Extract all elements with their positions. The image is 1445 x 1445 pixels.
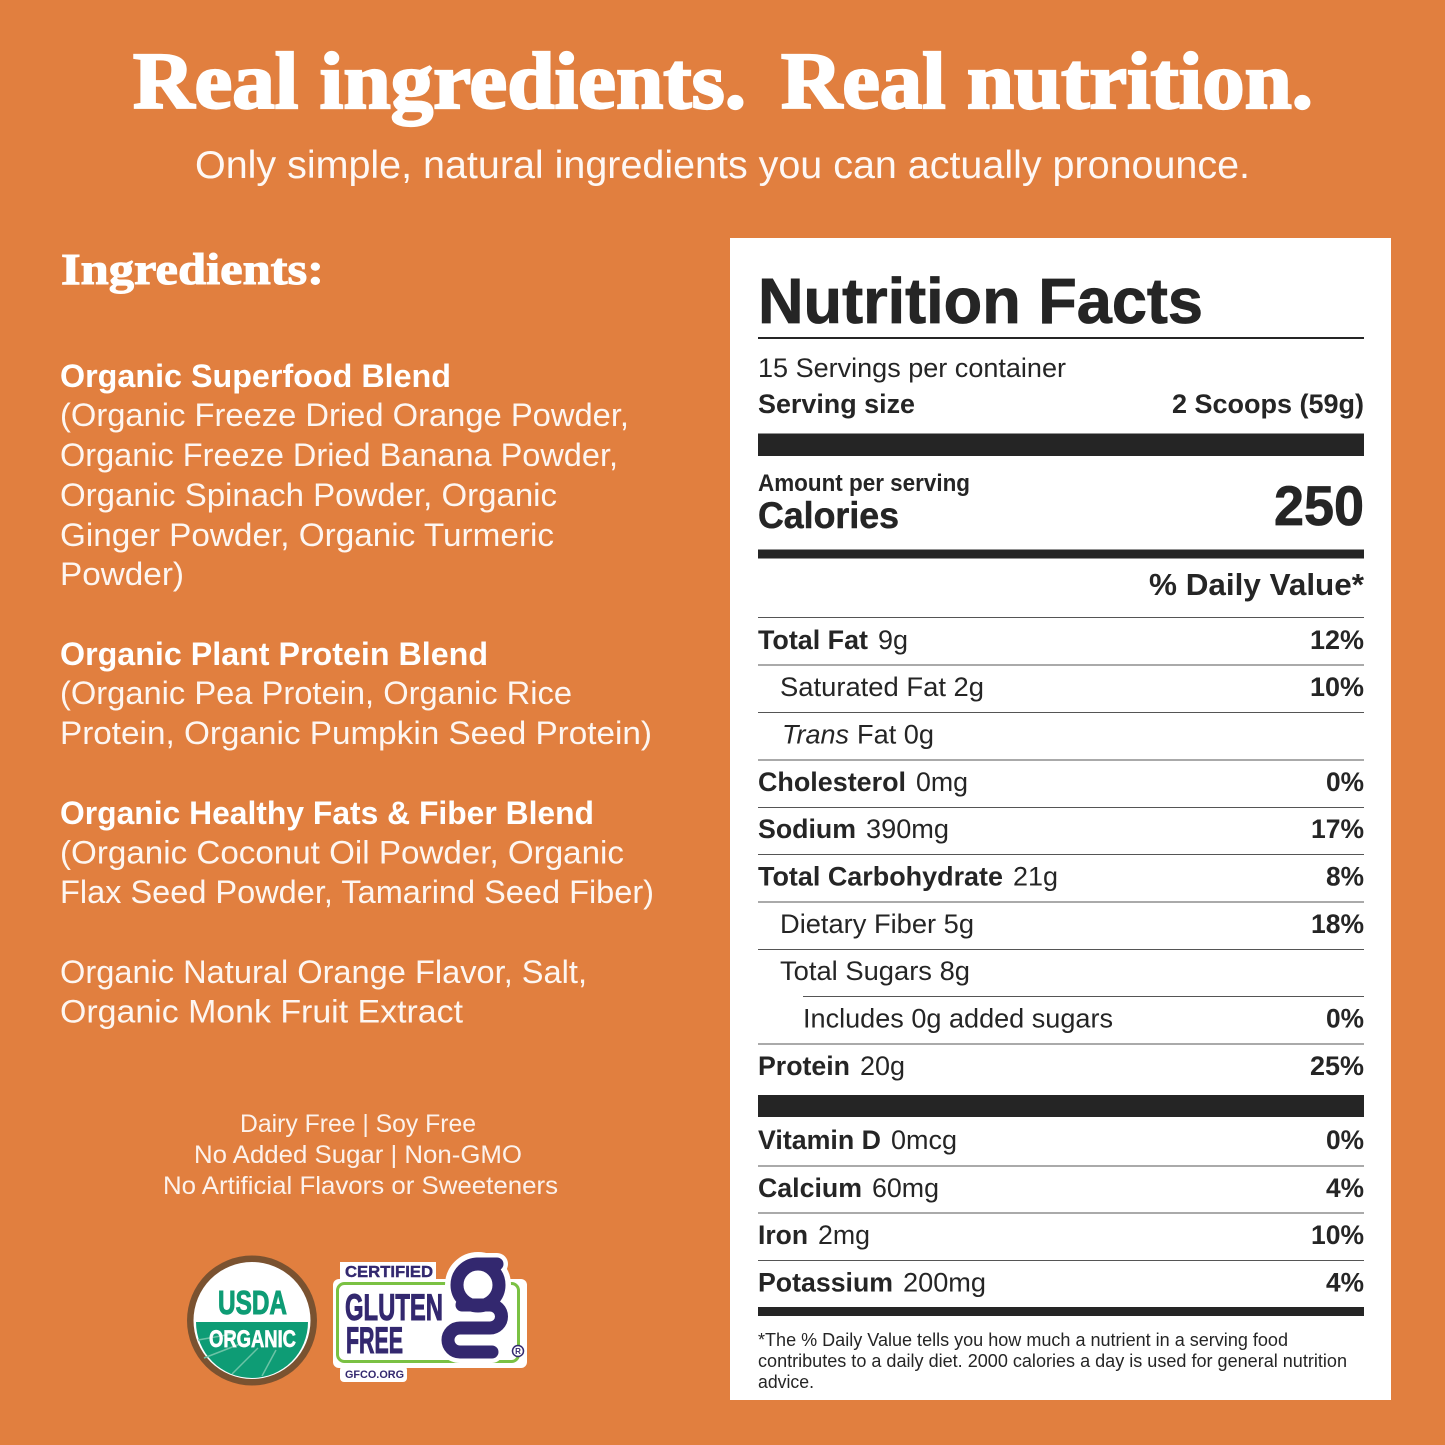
text block: organic superfood blend: Ginger Powder, Organic Turmeric (60, 517, 554, 553)
text block: other ingredients: Organic Monk Fruit Extract (60, 994, 463, 1030)
row: iron: 2mg (818, 1220, 870, 1250)
row: trans fat (782, 720, 934, 750)
row: potassium (758, 1268, 1364, 1298)
icon: certified gluten free badge: CERTIFIED (345, 1264, 433, 1281)
row: potassium: Potassium (758, 1268, 893, 1298)
nutrient rows (758, 625, 1364, 1298)
row: total carbohydrate: Total Carbohydrate (758, 862, 1003, 892)
row: total carbohydrate: 21g (1013, 862, 1058, 892)
row: vitamin d: Vitamin D (758, 1125, 881, 1155)
row: cholesterol: Cholesterol (758, 767, 906, 797)
calories (758, 470, 1364, 537)
text block: organic superfood blend: Organic Spinach Powder, Organic (60, 477, 557, 513)
text block: organic superfood blend: Organic Freeze Dried Banana Powder, (60, 437, 618, 473)
row: saturated fat: Saturated Fat 2g (780, 672, 984, 702)
row: protein: 20g (860, 1051, 905, 1081)
row: calcium: Calcium (758, 1173, 862, 1203)
row: vitamin d (758, 1125, 1364, 1155)
row: vitamin d: 0mcg (891, 1125, 957, 1155)
row: protein (758, 1051, 1364, 1081)
row: iron: Iron (758, 1220, 808, 1250)
title (133, 38, 1313, 126)
row: sodium: 390mg (866, 814, 949, 844)
row: added sugars (803, 1004, 1364, 1034)
row: total fat: 12% (1310, 625, 1364, 655)
row: calcium: 60mg (872, 1173, 939, 1203)
row: trans fat: Trans (782, 720, 849, 750)
panel: nutrition facts (730, 238, 1391, 1400)
title: Real nutrition. (781, 38, 1313, 126)
row: dietary fiber: Dietary Fiber 5g (780, 909, 974, 939)
row: added sugars: Includes 0g added sugars (803, 1004, 1113, 1034)
icon: certified gluten free badge: R (515, 1347, 521, 1356)
row: calcium (758, 1173, 1364, 1203)
text block: organic healthy fats and fiber blend: Flax Seed Powder, Tamarind Seed Fiber) (60, 874, 654, 910)
text block: organic healthy fats and fiber blend: (Organic Coconut Oil Powder, Organic (60, 834, 624, 870)
row: protein: Protein (758, 1051, 850, 1081)
row: saturated fat: 10% (1310, 672, 1364, 702)
icon: certified gluten free badge: GFCO.ORG (345, 1369, 404, 1381)
row: dietary fiber: 18% (1311, 909, 1364, 939)
row: vitamin d: 0% (1326, 1125, 1364, 1155)
icon: certified gluten free badge: GLUTEN (345, 1287, 443, 1328)
icon: certified gluten free badge: FREE (346, 1320, 403, 1361)
ingredients heading: Ingredients: (61, 245, 324, 294)
serving size (758, 389, 1364, 419)
serving size: 2 Scoops (59g) (1172, 389, 1364, 419)
row: total carbohydrate (758, 862, 1364, 892)
row: protein: 25% (1310, 1051, 1364, 1081)
subtitle: Only simple, natural ingredients you can actually pronounce. (195, 144, 1250, 187)
panel: ingredients (60, 245, 654, 1200)
text block: organic healthy fats and fiber blend: Organic Healthy Fats & Fiber Blend (60, 795, 594, 831)
row: sodium (758, 814, 1364, 844)
icon: USDA organic seal (187, 1256, 317, 1386)
title: Real ingredients. (133, 38, 746, 126)
text block: organic plant protein blend: (Organic Pea Protein, Organic Rice (60, 675, 572, 711)
row: potassium: 4% (1326, 1268, 1364, 1298)
row: iron (758, 1220, 1364, 1250)
text block: organic plant protein blend: Organic Plant Protein Blend (60, 636, 488, 672)
row: cholesterol (758, 767, 1364, 797)
servings per container: 15 Servings per container (758, 353, 1066, 383)
text block: dietary claims: Dairy Free | Soy Free (240, 1110, 476, 1138)
row: dietary fiber (780, 909, 1364, 939)
row: sodium: 17% (1311, 814, 1364, 844)
row: total carbohydrate: 8% (1326, 862, 1364, 892)
row: calcium: 4% (1326, 1173, 1364, 1203)
text block: organic superfood blend (60, 358, 629, 592)
calories: Calories (758, 495, 899, 536)
text block: other ingredients: Organic Natural Orange Flavor, Salt, (60, 954, 587, 990)
row: cholesterol: 0mg (916, 767, 968, 797)
footnote: contributes to a daily diet. 2000 calories a day is used for general nutrition (758, 1351, 1347, 1371)
text block: dietary claims (163, 1110, 558, 1200)
text block: dietary claims: No Artificial Flavors or Sweeteners (163, 1172, 558, 1200)
serving size: Serving size (758, 389, 915, 419)
row: added sugars: 0% (1326, 1004, 1364, 1034)
footnote: *The % Daily Value tells you how much a nutrient in a serving food (758, 1330, 1288, 1350)
icon: certified gluten free badge (333, 1262, 527, 1382)
icon: USDA organic seal: USDA (218, 1284, 287, 1321)
footnote: advice. (758, 1372, 814, 1392)
row: total fat: Total Fat (758, 625, 868, 655)
icon: USDA organic seal: ORGANIC (209, 1326, 296, 1353)
daily value heading: % Daily Value* (1149, 567, 1365, 602)
text block: organic healthy fats and fiber blend (60, 795, 654, 910)
row: total sugars: Total Sugars 8g (780, 956, 970, 986)
row: cholesterol: 0% (1326, 767, 1364, 797)
row: sodium: Sodium (758, 814, 856, 844)
text block: dietary claims: No Added Sugar | Non-GMO (194, 1141, 522, 1169)
calories: Amount per serving (758, 470, 970, 497)
row: saturated fat (780, 672, 1364, 702)
row: potassium: 200mg (903, 1268, 986, 1298)
text block: organic superfood blend: (Organic Freeze Dried Orange Powder, (60, 397, 629, 433)
nutrition facts heading: Nutrition Facts (758, 265, 1203, 337)
row: total fat: 9g (878, 625, 908, 655)
row: iron: 10% (1311, 1220, 1364, 1250)
text block: organic superfood blend: Organic Superfood Blend (60, 358, 451, 394)
text block: organic plant protein blend (60, 636, 652, 751)
row: trans fat: Fat 0g (857, 720, 934, 750)
footnote (758, 1330, 1347, 1392)
text block: other ingredients (60, 954, 587, 1030)
calories: 250 (1274, 474, 1364, 537)
text block: organic plant protein blend: Protein, Organic Pumpkin Seed Protein) (60, 715, 652, 751)
text block: organic superfood blend: Powder) (60, 556, 184, 592)
row: total fat (758, 625, 1364, 655)
